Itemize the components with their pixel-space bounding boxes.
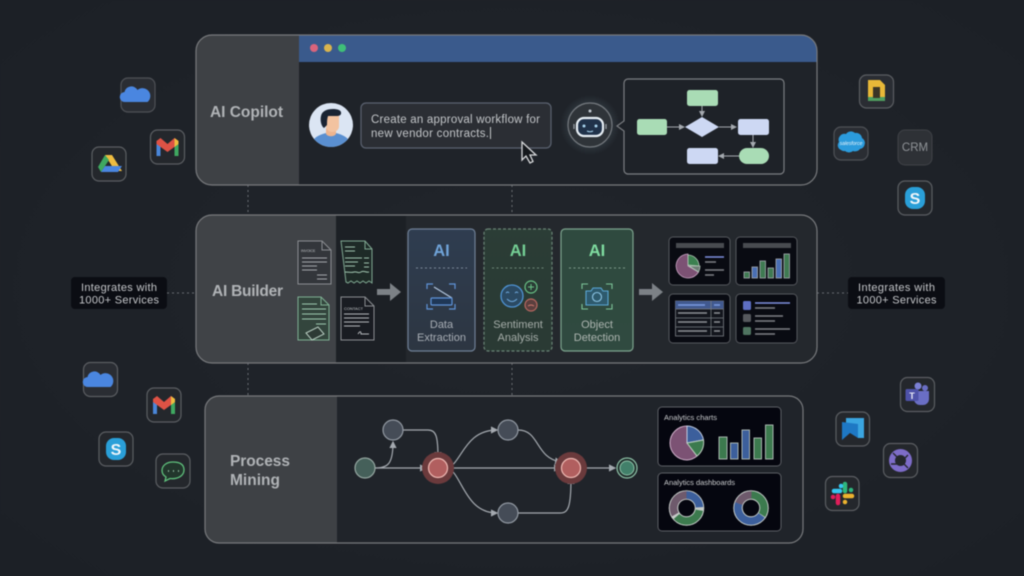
card: Sentiment Analysis: Analysis	[498, 332, 539, 344]
icon: CRM: CRM	[902, 142, 928, 154]
prompt input box	[361, 103, 551, 148]
icon: Skype	[898, 181, 932, 215]
icon: contract document: CONTACT	[344, 306, 364, 311]
callout: integrations right: Integrates with	[858, 282, 935, 294]
icon: scanner	[427, 284, 455, 309]
card: Object Detection	[561, 229, 633, 351]
card: Sentiment Analysis: Sentiment	[493, 319, 543, 331]
process graph	[355, 420, 637, 523]
callout: integrations right: 1000+ Services	[856, 294, 937, 306]
dotted connectors	[167, 185, 848, 396]
icon: contract document	[341, 297, 374, 340]
heading: Process Mining	[230, 453, 290, 489]
card: Sentiment Analysis: AI	[510, 242, 526, 260]
icon: chat	[156, 454, 190, 488]
arrow: documents to AI cards	[377, 283, 401, 301]
icon: robot assistant	[560, 95, 620, 155]
callout: integrations left: 1000+ Services	[79, 294, 160, 306]
prompt input box: Create an approval workflow for	[371, 114, 540, 126]
card: Data Extraction: AI	[433, 242, 450, 260]
callout: integrations left	[71, 277, 167, 309]
window control dots	[310, 44, 346, 52]
panel: AI Builder	[196, 215, 817, 363]
chart panel: Analytics charts	[658, 407, 781, 466]
icon: user avatar	[309, 103, 353, 147]
card: Data Extraction	[408, 229, 475, 351]
panel: AI Copilot	[196, 35, 817, 185]
card: Sentiment Analysis	[484, 229, 552, 351]
icon: Drive	[92, 147, 126, 181]
icon: invoice document	[298, 241, 331, 284]
card: Data Extraction: Extraction	[417, 332, 466, 344]
icon: Skype lower	[99, 432, 133, 466]
callout: integrations right	[848, 277, 945, 309]
icon: sentiment faces	[501, 281, 537, 311]
icon: file storage	[860, 75, 894, 108]
icon: cloud storage lower	[83, 362, 118, 396]
icon: Gmail	[150, 130, 184, 164]
callout: integrations left: Integrates with	[81, 282, 157, 294]
icon: Teams	[900, 378, 934, 412]
chart panel: Analytics dashboards: Analytics dashboards	[664, 478, 735, 487]
icon: purple ring	[884, 444, 918, 478]
card: Data Extraction: Data	[430, 319, 454, 331]
icon: blue cube	[836, 412, 870, 446]
icon: Salesforce: salesforce	[840, 141, 863, 147]
dashboard: data table	[669, 294, 730, 343]
dashboard: list	[736, 294, 797, 343]
heading: Process Mining: Mining	[230, 472, 280, 489]
icon: receipt document	[341, 241, 372, 283]
icon: cloud storage	[120, 78, 155, 112]
heading: AI Builder: AI Builder	[212, 283, 283, 300]
icon: camera	[582, 284, 612, 309]
dashboard: pie summary	[669, 237, 730, 285]
dashboard: bar summary	[736, 237, 797, 285]
callout: workflow diagram	[617, 79, 784, 174]
card: Object Detection: Detection	[574, 332, 620, 344]
chart panel: Analytics dashboards	[658, 473, 781, 531]
donut chart left	[669, 490, 704, 526]
card: Object Detection: AI	[589, 242, 605, 260]
icon: Slack	[826, 476, 859, 510]
icon: mouse cursor	[522, 142, 536, 163]
icon: agreement document	[298, 297, 329, 340]
panel: Process Mining	[205, 396, 803, 543]
icon: Teams: T	[909, 391, 915, 401]
arrow: AI cards to dashboards	[639, 283, 663, 301]
heading: AI Copilot: AI Copilot	[210, 104, 283, 121]
icon: Salesforce	[834, 127, 868, 160]
prompt input box: new vendor contracts.	[371, 128, 489, 140]
icon: Gmail lower	[147, 388, 181, 422]
icon: CRM	[898, 130, 932, 165]
heading: Process Mining: Process	[230, 453, 290, 470]
donut chart right	[733, 490, 769, 526]
card: Object Detection: Object	[581, 319, 613, 331]
chart panel: Analytics charts: Analytics charts	[664, 413, 717, 422]
icon: invoice document: INVOICE	[301, 249, 316, 253]
